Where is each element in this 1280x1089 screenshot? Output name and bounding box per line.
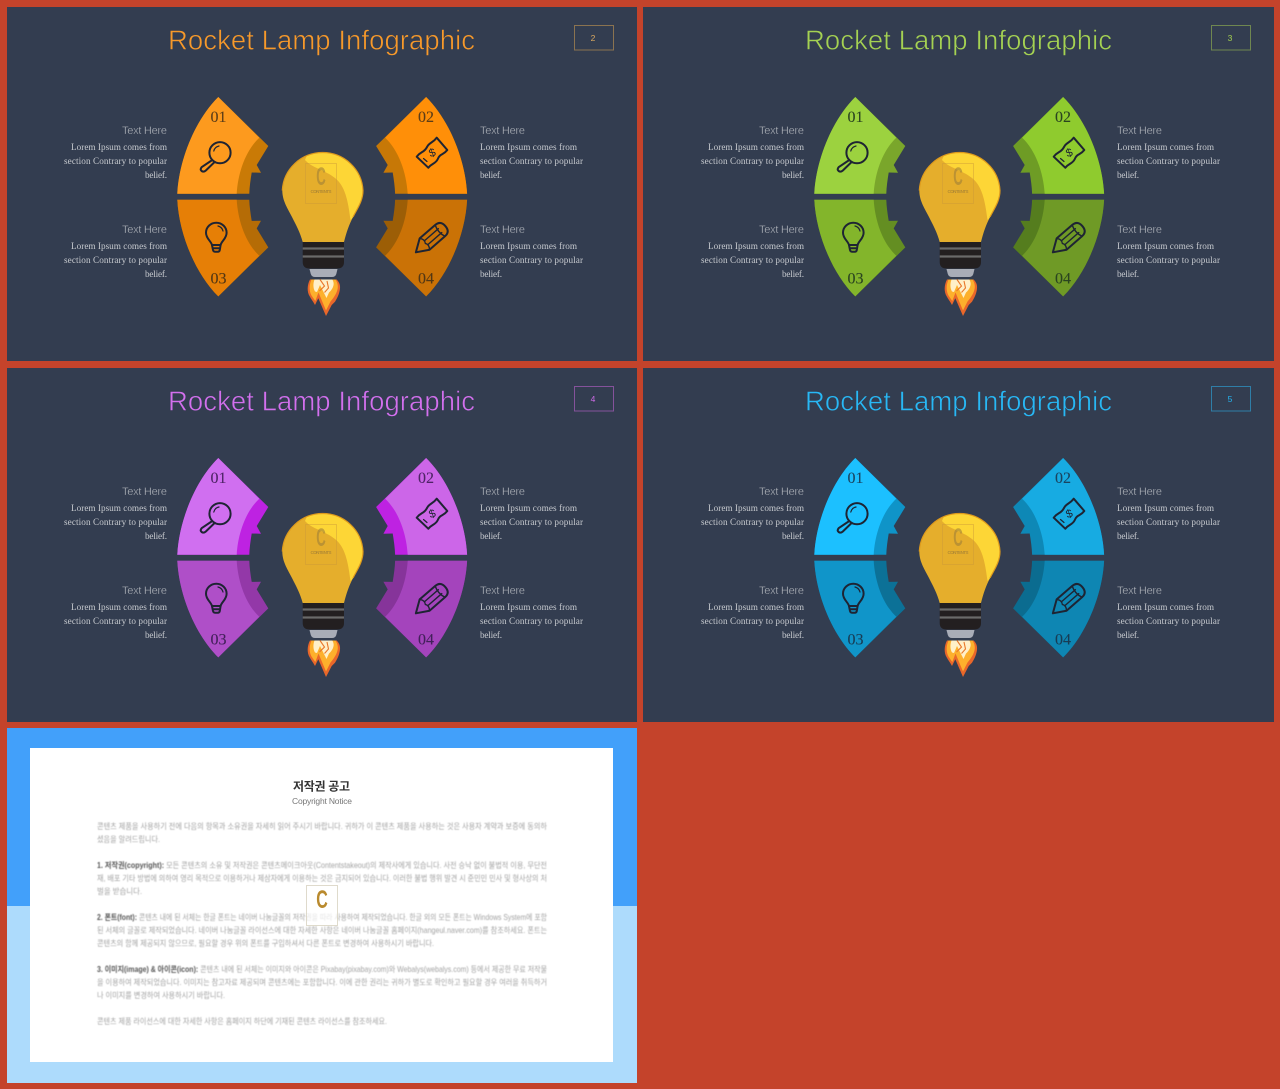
wedge 02 with money: $ — [427, 507, 438, 521]
wedge 04 with pencil: 04 — [418, 270, 434, 288]
paragraph 3: image and icon: 나 이미지를 변경하여 사용하시기 바랍니다. — [97, 990, 225, 1000]
text block top right: belief. — [480, 531, 502, 541]
wedge 02 with money: 02 — [1055, 109, 1071, 126]
panel background — [643, 7, 1274, 361]
text block top right: Text Here — [1117, 486, 1162, 498]
panel: copyright notice — [7, 728, 637, 1083]
panel: orange rocket lamp — [7, 7, 637, 361]
title: Rocket Lamp Infographic — [168, 24, 475, 56]
text block bottom left — [64, 224, 167, 279]
wedge 04 with pencil: 04 — [418, 632, 434, 648]
wedge 01 with magnifier: 01 — [210, 470, 226, 487]
text block bottom right — [480, 224, 583, 279]
watermark — [306, 524, 336, 564]
wedge 03 with bulb icon: 03 — [848, 270, 864, 288]
paragraph 1: copyright: 벌을 받습니다. — [97, 886, 142, 896]
text block bottom left: Lorem Ipsum comes from — [71, 241, 167, 251]
text block bottom left — [701, 585, 804, 640]
text block top right: Lorem Ipsum comes from — [480, 503, 577, 513]
rocket lamp bulb — [282, 509, 366, 677]
watermark: CONTENTS — [948, 550, 968, 555]
text block top left: section Contrary to popular — [64, 517, 167, 527]
title: Rocket Lamp Infographic — [805, 24, 1112, 56]
page number box — [574, 26, 614, 50]
blue upper background — [7, 728, 637, 906]
text block bottom right: belief. — [1117, 269, 1139, 279]
text block bottom right: belief. — [1117, 630, 1139, 640]
page number box: 4 — [591, 394, 596, 404]
text block top right — [480, 486, 583, 541]
wedge 04 with pencil: 04 — [1055, 632, 1071, 648]
panel background — [7, 368, 637, 722]
text block bottom right — [1117, 585, 1220, 640]
text block top right: section Contrary to popular — [1117, 156, 1220, 166]
page number box — [1212, 386, 1250, 411]
wedge 01 with magnifier: 01 — [848, 109, 864, 126]
watermark: C — [316, 164, 326, 191]
wedge 04 with pencil — [376, 561, 467, 657]
text block top left: section Contrary to popular — [64, 156, 167, 166]
text block top left: Text Here — [122, 125, 167, 137]
text block top left: Lorem Ipsum comes from — [71, 503, 167, 513]
text block bottom left: section Contrary to popular — [64, 616, 167, 626]
wedge 02 with money — [1013, 97, 1104, 194]
wedge 02 with money — [1013, 458, 1104, 555]
wedge 02 with money: 02 — [1055, 470, 1071, 487]
paragraph 1: copyright: 1. 저작권(copyright): 모든 콘텐츠의 소유 및 저작권은 콘텐츠메이크아웃(Contentstakeout)의 제작사에게 있습니다. 사전 승낙 없이 불법적 이용, 무단전 — [97, 860, 547, 870]
wedge 02 with money: $ — [1064, 146, 1075, 160]
text block bottom right: Text Here — [1117, 585, 1162, 597]
text block top right: Lorem Ipsum comes from — [1117, 142, 1214, 152]
text block bottom left: Text Here — [122, 585, 167, 597]
wedge 02 with money — [376, 458, 467, 555]
text block top right: belief. — [1117, 531, 1139, 541]
panel background — [7, 7, 637, 361]
wedge 03 with bulb icon: 03 — [210, 632, 226, 648]
rocket lamp bulb — [282, 148, 366, 316]
text block bottom left — [701, 224, 804, 279]
light blue lower background — [7, 906, 637, 1083]
wedge 04 with pencil — [376, 200, 467, 296]
title: Rocket Lamp Infographic — [805, 386, 1112, 416]
text block bottom left: belief. — [145, 269, 167, 279]
text block top left: belief. — [782, 531, 804, 541]
watermark — [942, 164, 974, 204]
text block bottom right: Lorem Ipsum comes from — [480, 241, 577, 251]
text block top right: Lorem Ipsum comes from — [1117, 503, 1214, 513]
text block top left: Text Here — [759, 486, 804, 498]
text block bottom right: Lorem Ipsum comes from — [1117, 602, 1214, 612]
wedge 02 with money: 02 — [418, 470, 434, 487]
paragraph 2: font: 2. 폰트(font): 콘텐츠 내에 된 서체는 한글 폰트는 네이버 나눔글꼴의 저작권을 따라 사용하여 제작되었습니다. 한글 외의 모든 폰트는 Windows System에 포함 — [97, 912, 547, 922]
text block top left: belief. — [145, 531, 167, 541]
wedge 01 with magnifier — [177, 458, 268, 555]
page number box — [574, 386, 614, 411]
heading: 저작권 공고 — [293, 778, 350, 794]
text block top left — [701, 125, 804, 180]
text block top left: belief. — [782, 170, 804, 180]
panel: blue rocket lamp — [643, 368, 1274, 722]
watermark — [306, 164, 336, 204]
paragraph 3: image and icon: 3. 이미지(image) & 아이콘(icon): 콘텐츠 내에 된 서체는 이미지와 아이콘은 Pixabay(pixabay.com)와 Webalys(webalys.com) 등에서 제공한 무료 저작물 — [97, 964, 547, 974]
wedge 01 with magnifier: 01 — [848, 470, 864, 487]
intro paragraph: 셨음을 알려드립니다. — [97, 834, 160, 844]
text block bottom right: section Contrary to popular — [1117, 255, 1220, 265]
text block bottom left — [64, 585, 167, 640]
intro paragraph — [97, 821, 547, 844]
wedge 02 with money — [376, 97, 467, 194]
text block bottom right: Lorem Ipsum comes from — [1117, 241, 1214, 251]
text block top right — [480, 125, 583, 180]
text block bottom right: Text Here — [480, 585, 525, 597]
text block bottom right: Lorem Ipsum comes from — [480, 602, 577, 612]
paragraph 3: image and icon — [97, 964, 547, 1000]
wedge 01 with magnifier — [177, 97, 268, 194]
panel background — [643, 368, 1274, 722]
text block bottom right: belief. — [480, 269, 502, 279]
text block bottom right — [1117, 224, 1220, 279]
text block bottom left: Text Here — [122, 224, 167, 236]
page number box: 2 — [591, 33, 596, 43]
text block bottom right — [480, 585, 583, 640]
wedge 02 with money: 02 — [418, 109, 434, 126]
watermark: C — [953, 164, 963, 191]
wedge 03 with bulb icon — [177, 561, 268, 657]
text block top right: belief. — [480, 170, 502, 180]
text block bottom left: Text Here — [759, 585, 804, 597]
text block top right — [1117, 486, 1220, 541]
wedge 03 with bulb icon — [814, 200, 905, 296]
text block top left: Lorem Ipsum comes from — [71, 142, 167, 152]
text block bottom left: section Contrary to popular — [701, 616, 804, 626]
watermark — [942, 524, 974, 564]
text block top left: Text Here — [759, 125, 804, 137]
text block bottom left: Lorem Ipsum comes from — [71, 602, 167, 612]
paragraph 1: copyright: 재, 배포 기타 방법에 의하여 영리 목적으로 이용하거나 제삼자에게 이용하는 것은 금지되어 있습니다. 이러한 불법 행위 발견 시 준민민 민사 및 형사상의 처 — [97, 873, 547, 883]
text block top left: Text Here — [122, 486, 167, 498]
page number box: 3 — [1228, 33, 1233, 43]
wedge 04 with pencil — [1013, 200, 1104, 296]
watermark: C — [316, 887, 328, 914]
text block bottom left: Lorem Ipsum comes from — [708, 602, 804, 612]
paragraph 2: font: 콘텐츠의 함께 제공되지 않으므로, 필요할 경우 위의 폰트를 구입하셔서 다른 폰트로 변경하여 사용하시기 바랍니다. — [97, 938, 434, 948]
watermark: CONTENTS — [310, 189, 332, 194]
paragraph 2: font — [97, 912, 547, 948]
text block bottom left: belief. — [145, 630, 167, 640]
text block bottom left: belief. — [782, 269, 804, 279]
text block top right: Text Here — [1117, 125, 1162, 137]
text block bottom right: Text Here — [480, 224, 525, 236]
white card — [30, 748, 613, 1062]
wedge 03 with bulb icon: 03 — [210, 270, 226, 288]
text block top left — [64, 486, 167, 541]
panel: purple rocket lamp — [7, 368, 637, 722]
wedge 03 with bulb icon: 03 — [848, 632, 864, 648]
text block top right: Text Here — [480, 125, 525, 137]
text block top left — [64, 125, 167, 180]
text block top right: belief. — [1117, 170, 1139, 180]
title: Rocket Lamp Infographic — [168, 386, 475, 416]
text block top right: Text Here — [480, 486, 525, 498]
wedge 04 with pencil: 04 — [1055, 270, 1071, 288]
text block top right: section Contrary to popular — [480, 156, 583, 166]
wedge 03 with bulb icon — [814, 561, 905, 657]
wedge 01 with magnifier — [814, 458, 905, 555]
text block bottom left: Text Here — [759, 224, 804, 236]
subheading: Copyright Notice — [292, 796, 352, 806]
text block bottom left: section Contrary to popular — [64, 255, 167, 265]
wedge 01 with magnifier: 01 — [210, 109, 226, 126]
text block bottom left: Lorem Ipsum comes from — [708, 241, 804, 251]
text block bottom right: Text Here — [1117, 224, 1162, 236]
watermark: CONTENTS — [310, 550, 332, 555]
wedge 01 with magnifier — [814, 97, 905, 194]
text block top left: section Contrary to popular — [701, 517, 804, 527]
rocket lamp bulb — [919, 148, 1003, 316]
text block bottom left: section Contrary to popular — [701, 255, 804, 265]
panel: green rocket lamp — [643, 7, 1274, 361]
wedge 03 with bulb icon — [177, 200, 268, 296]
paragraph 2: font: 된 서체의 글꼴로 제작되었습니다. 네이버 나눔글꼴 라이선스에 대한 자세한 사항은 네이버 나눔글꼴 홈페이지(hangeul.naver.com)를 참조하세요. 폰트는 — [97, 925, 547, 935]
paragraph 1: copyright — [97, 860, 547, 896]
text block top right: Lorem Ipsum comes from — [480, 142, 577, 152]
page number box: 5 — [1228, 394, 1233, 404]
wedge 02 with money: $ — [427, 146, 438, 160]
text block top left: belief. — [145, 170, 167, 180]
text block top right: section Contrary to popular — [480, 517, 583, 527]
wedge 04 with pencil — [1013, 561, 1104, 657]
text block top left — [701, 486, 804, 541]
page number box — [1212, 26, 1250, 50]
paragraph 3: image and icon: 을 이용하여 제작되었습니다. 이미지는 참고자료 제공되며 콘텐츠에는 포함합니다. 이에 관한 권리는 귀하가 별도로 확인하고 필요할 경우 여러을 취득하거 — [97, 977, 547, 987]
watermark: C — [953, 525, 963, 552]
closing line: 콘텐츠 제품 라이선스에 대한 자세한 사항은 홈페이지 하단에 기재된 콘텐츠 라이선스를 참조하세요. — [97, 1016, 387, 1026]
watermark — [306, 886, 338, 926]
intro paragraph: 콘텐츠 제품을 사용하기 전에 다음의 항목과 소유권을 자세히 읽어 주시기 바랍니다. 귀하가 이 콘텐츠 제품을 사용하는 것은 사용자 계약과 보증에 동의하 — [97, 821, 547, 831]
rocket lamp bulb — [919, 509, 1003, 677]
text block bottom right: section Contrary to popular — [1117, 616, 1220, 626]
text block bottom right: section Contrary to popular — [480, 616, 583, 626]
text block top left: Lorem Ipsum comes from — [708, 503, 804, 513]
text block top right: section Contrary to popular — [1117, 517, 1220, 527]
watermark: CONTENTS — [948, 189, 968, 194]
text block top left: section Contrary to popular — [701, 156, 804, 166]
text block bottom left: belief. — [782, 630, 804, 640]
text block top left: Lorem Ipsum comes from — [708, 142, 804, 152]
text block bottom right: section Contrary to popular — [480, 255, 583, 265]
text block top right — [1117, 125, 1220, 180]
text block bottom right: belief. — [480, 630, 502, 640]
wedge 02 with money: $ — [1064, 507, 1075, 521]
watermark: C — [316, 525, 326, 552]
